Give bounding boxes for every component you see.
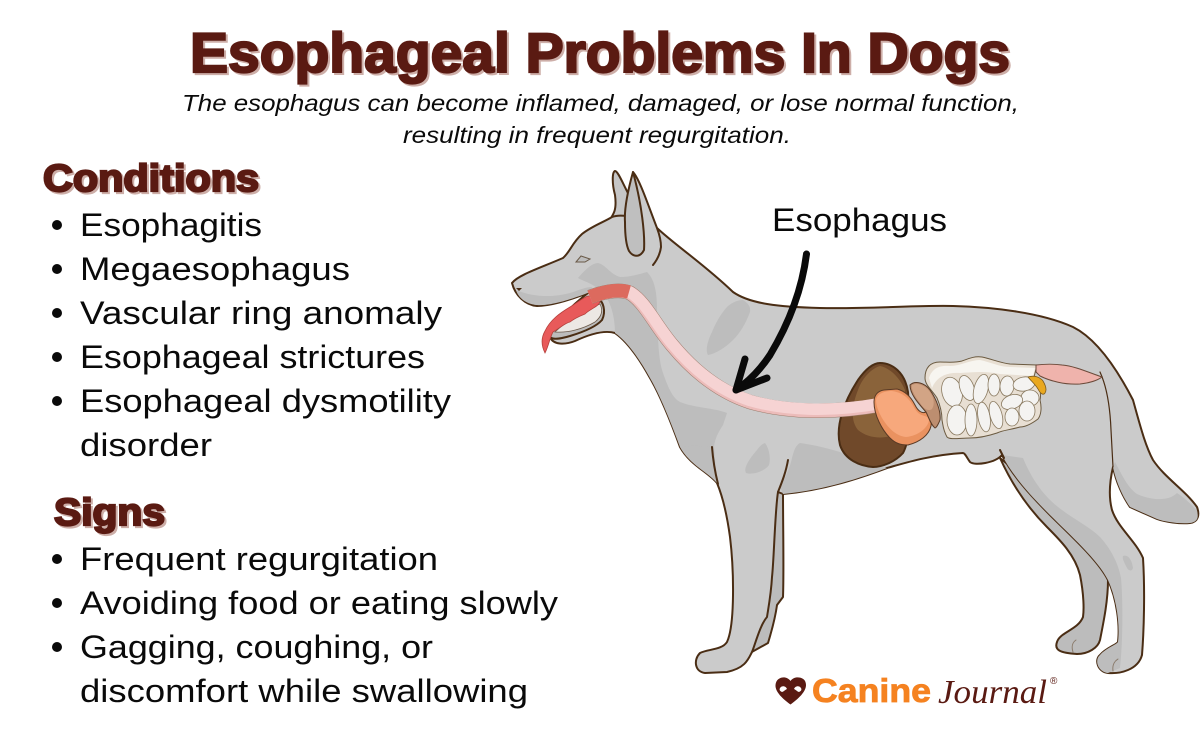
icon: heart nose [775,677,806,704]
conditions list: disorder [80,427,212,463]
esophagus upper red section [590,291,629,297]
esophagus [590,291,880,411]
rectum [1036,364,1102,384]
conditions list: Esophagitis [80,207,262,243]
panel: conditions [43,158,451,463]
registered mark: ® [1050,676,1058,687]
wordmark: Journal: Journal [938,674,1047,711]
dog body [512,216,1198,673]
stomach [874,389,931,445]
tongue [542,296,600,353]
liver [839,363,909,467]
signs list: discomfort while swallowing [80,673,528,709]
subtitle [182,90,1019,148]
heading: signs: Signs [54,492,165,534]
subtitle: The esophagus can become inflamed, damaged, or lose normal function, [182,90,1019,116]
gland: yellow [1028,376,1046,394]
dog illustration [512,171,1198,673]
nose [516,288,522,291]
near ear [625,172,661,265]
conditions list: Esophageal dysmotility [80,383,451,419]
pancreas lobe [910,383,940,428]
signs list: Frequent regurgitation [80,541,438,577]
heading: conditions: Conditions [43,158,259,200]
title: Esophageal Problems In Dogs [190,21,1010,84]
fold lines [712,372,1118,671]
conditions list: Megaesophagus [80,251,350,287]
conditions list: Esophageal strictures [80,339,425,375]
far rear leg [1000,458,1108,654]
far front leg [750,488,783,653]
far ear [607,171,640,225]
arrow [736,254,806,390]
label: esophagus: Esophagus [772,202,947,238]
subtitle: resulting in frequent regurgitation. [403,122,791,148]
conditions list [52,207,451,463]
mouth [542,296,604,353]
signs list [52,541,558,709]
eye [576,256,590,262]
signs list: Gagging, coughing, or [80,629,433,665]
intestines [925,357,1041,439]
panel: signs [52,492,558,709]
wordmark: Canine: Canine [812,672,931,709]
signs list: Avoiding food or eating slowly [80,585,558,621]
logo [775,672,1058,711]
body shading [516,263,1198,673]
conditions list: Vascular ring anomaly [80,295,442,331]
